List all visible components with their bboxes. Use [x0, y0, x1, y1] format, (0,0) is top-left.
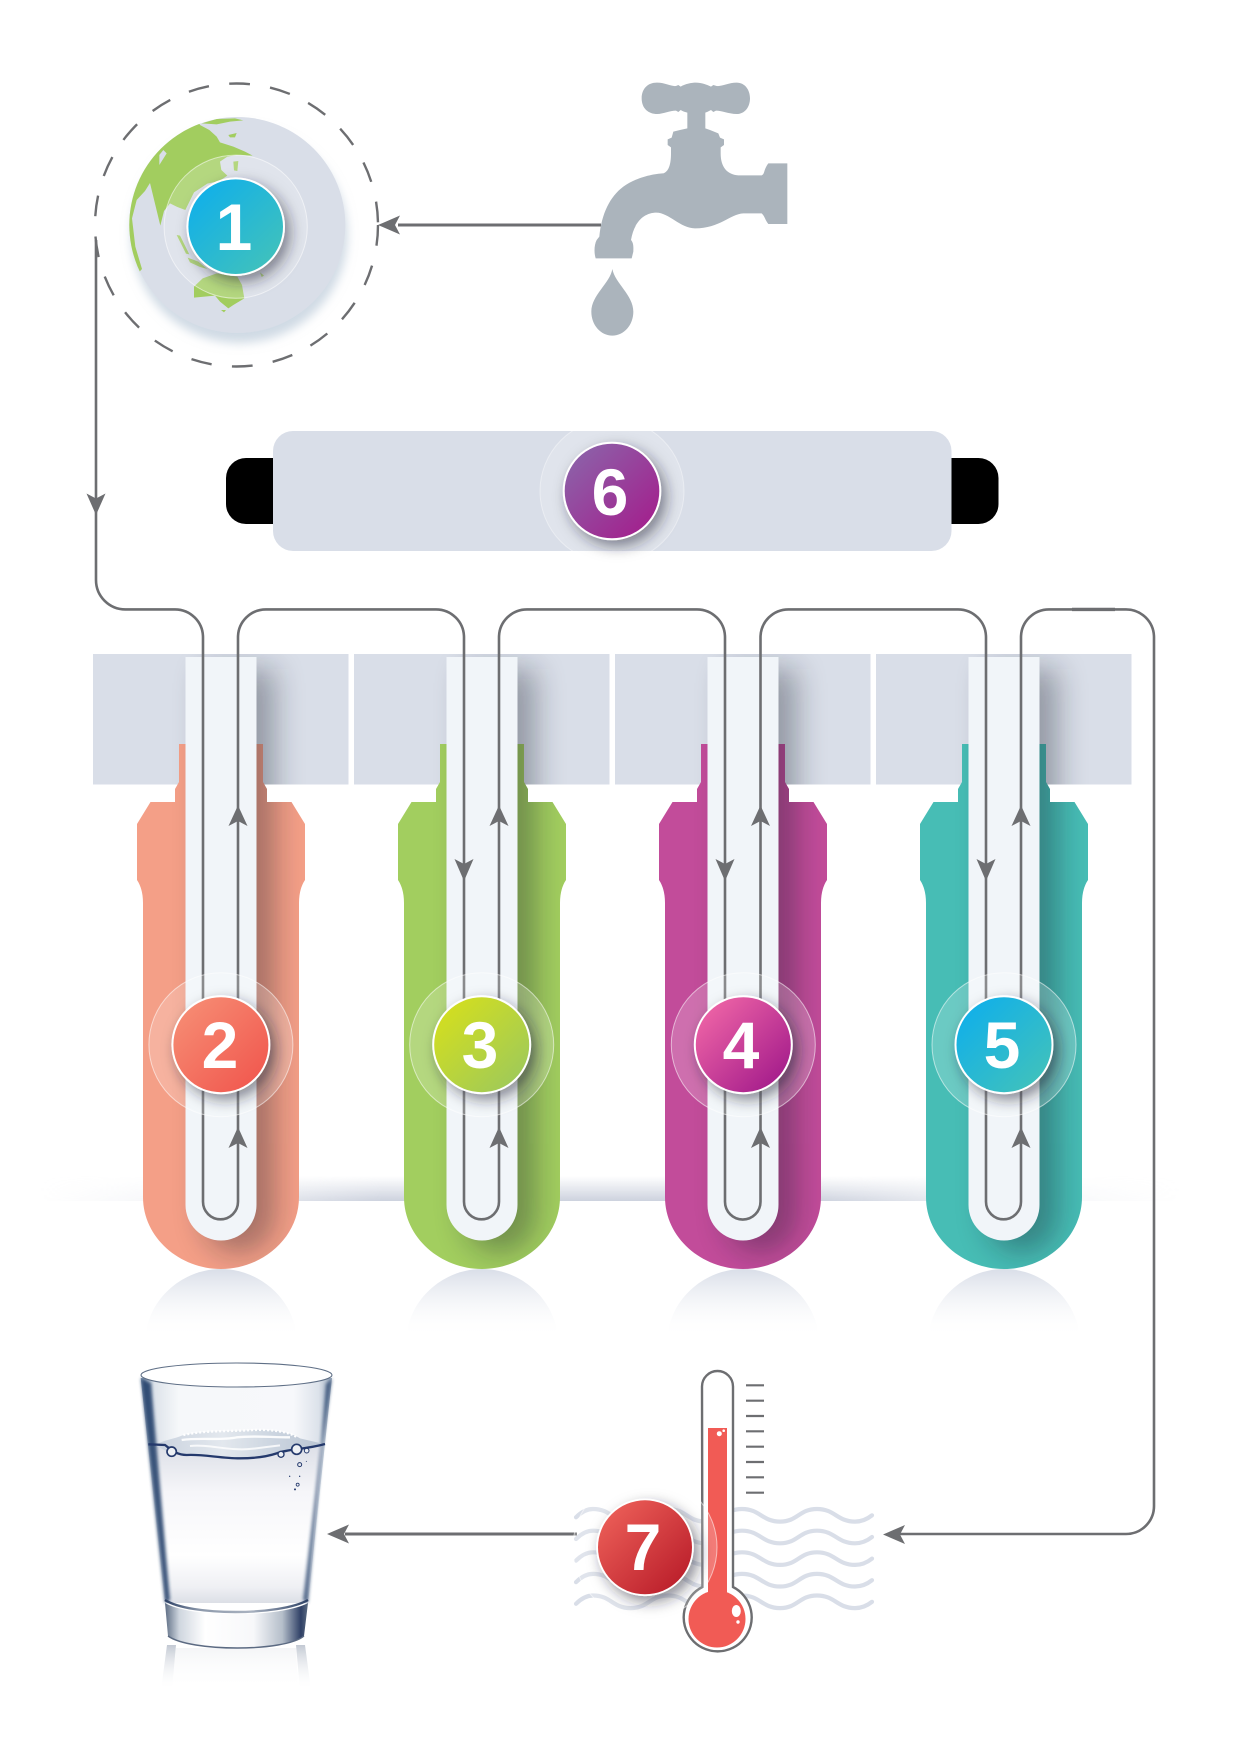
- infographic: water filtration flow: [86, 82, 1156, 1674]
- icon: thermometer: [684, 1371, 764, 1651]
- badge 5: 5: [984, 1008, 1020, 1082]
- badge 2: [149, 973, 293, 1117]
- badge 4: 4: [723, 1008, 760, 1082]
- floor horizon shading: [298, 1180, 926, 1201]
- badge 6: 6: [592, 455, 628, 529]
- arrowheads along flow line: [86, 494, 1030, 1544]
- waves under thermometer: [576, 1509, 872, 1608]
- badge 6: [540, 419, 684, 563]
- panel: bottle reflections: [145, 1269, 1080, 1342]
- icon: globe: [120, 105, 345, 333]
- badge 7: 7: [625, 1510, 661, 1584]
- panel: filter unit 5 (teal): [876, 654, 1132, 1269]
- badge 4: [671, 973, 815, 1117]
- badge 5: [932, 973, 1076, 1117]
- icon: glass of water: [141, 1363, 332, 1690]
- badge 3: 3: [462, 1008, 498, 1082]
- panel: filter unit 3 (green): [354, 654, 610, 1269]
- icon: faucet with drop: [591, 83, 787, 336]
- panel: filter unit 2 (salmon): [93, 654, 348, 1269]
- panel: filter unit 4 (magenta): [615, 654, 870, 1269]
- badge 1: 1: [216, 190, 252, 264]
- badge 7: [573, 1475, 717, 1619]
- dashed orbit ring: [95, 84, 378, 366]
- arrow: faucet to globe: [378, 216, 601, 234]
- flow line through all stages: [96, 240, 1154, 1534]
- filter 6 with end caps: [226, 431, 998, 551]
- badge 1: [164, 155, 307, 298]
- badge 3: [410, 973, 554, 1117]
- badge 2: 2: [202, 1008, 238, 1082]
- arrow: thermometer to glass: [327, 1524, 577, 1544]
